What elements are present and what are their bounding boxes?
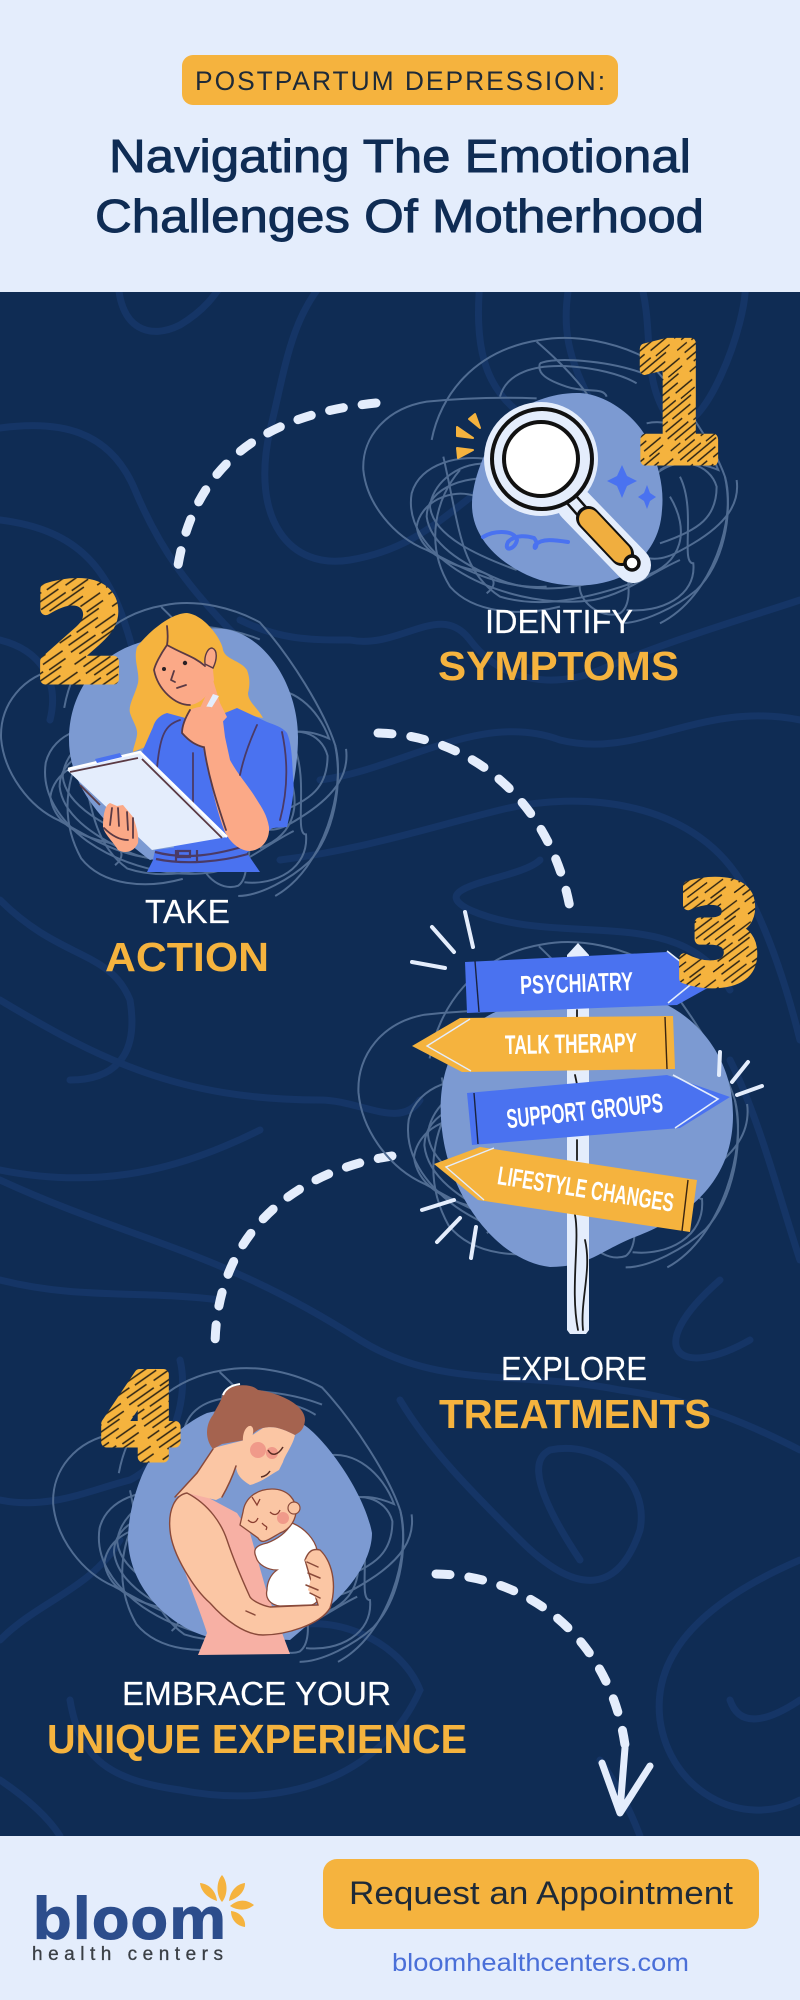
header tag: POSTPARTUM DEPRESSION: <box>195 66 607 96</box>
dashed arrow 3 to 4 <box>215 1156 392 1348</box>
label: embrace your unique experience: EMBRACE YOUR <box>122 1675 391 1712</box>
label: embrace your unique experience: UNIQUE EXPERIENCE <box>47 1716 467 1762</box>
sign: support groups: SUPPORT GROUPS <box>505 1088 664 1134</box>
sign: lifestyle changes: LIFESTYLE CHANGES <box>496 1160 676 1218</box>
woman dress <box>142 708 294 853</box>
logo flower <box>200 1875 254 1927</box>
mother hand <box>305 1551 332 1600</box>
header tag <box>182 55 618 105</box>
emphasis ticks <box>412 912 762 1258</box>
label: take action: TAKE <box>145 893 230 930</box>
mother hair <box>207 1385 305 1449</box>
label: identify symptoms: SYMPTOMS <box>438 643 679 689</box>
woman lower hand <box>103 803 138 852</box>
background swirl pattern <box>0 280 800 1836</box>
number 2: 2 <box>35 561 125 710</box>
blob 1 <box>472 393 662 586</box>
mother arm <box>170 1493 333 1635</box>
dashed arrow to footer <box>436 1574 650 1813</box>
call to action button <box>323 1859 759 1929</box>
label: take action <box>105 893 269 980</box>
yellow burst <box>457 414 480 458</box>
label: explore treatments: EXPLORE <box>501 1350 647 1387</box>
sign: psychiatry <box>465 951 713 1013</box>
dashed arrow 2 to 3 <box>378 733 570 908</box>
label: explore treatments <box>439 1350 711 1437</box>
baby body <box>255 1523 320 1606</box>
sign: support groups <box>467 1075 730 1145</box>
blue sparkles <box>607 465 656 509</box>
footer background <box>0 1836 800 2000</box>
baby head <box>240 1489 300 1541</box>
logo: bloom health centers: health centers <box>32 1944 223 1965</box>
label: take action: ACTION <box>105 934 269 980</box>
tablet <box>67 753 227 850</box>
woman neck <box>200 680 227 730</box>
woman skirt <box>147 840 260 872</box>
title: Challenges Of Motherhood <box>95 190 704 242</box>
dark main panel <box>0 292 800 1836</box>
woman hair <box>130 613 263 752</box>
website url: bloomhealthcenters.com <box>392 1949 689 1977</box>
woman arm <box>182 707 269 851</box>
blob 2 <box>69 628 298 860</box>
magnifier <box>484 402 639 570</box>
sign: talk therapy: TALK THERAPY <box>505 1028 637 1060</box>
sign: lifestyle changes <box>434 1147 697 1232</box>
title <box>95 130 704 242</box>
label: identify symptoms <box>438 603 679 689</box>
step 2 illustration: thinking woman <box>1 603 346 896</box>
blue squiggle <box>483 532 568 549</box>
number 3: 3 <box>676 859 762 1013</box>
title: Navigating The Emotional <box>109 130 691 182</box>
number 1: 1 <box>629 312 723 498</box>
logo: bloom health centers: bloom <box>32 1885 227 1953</box>
mother dress <box>175 1493 290 1655</box>
woman face <box>154 645 214 705</box>
mother head and neck <box>175 1427 295 1500</box>
sign: talk therapy <box>412 1016 675 1072</box>
sign: psychiatry: PSYCHIATRY <box>520 966 634 1000</box>
blob 3 <box>441 1003 733 1267</box>
logo: bloom health centers <box>32 1875 254 1965</box>
blob 4 <box>128 1409 372 1640</box>
call to action button: Request an Appointment <box>349 1875 733 1911</box>
step 1 illustration: magnifying glass <box>363 338 737 623</box>
header background <box>0 0 800 292</box>
step 3 illustration: signpost <box>358 912 762 1334</box>
step 4 illustration: mother and baby <box>53 1368 412 1662</box>
label: identify symptoms: IDENTIFY <box>485 603 633 640</box>
label: explore treatments: TREATMENTS <box>439 1391 711 1437</box>
number 4: 4 <box>102 1352 180 1484</box>
label: embrace your unique experience <box>47 1675 467 1762</box>
post <box>567 943 589 1334</box>
woman belt <box>155 846 248 862</box>
dashed arrow 1 to 2 <box>177 403 376 572</box>
